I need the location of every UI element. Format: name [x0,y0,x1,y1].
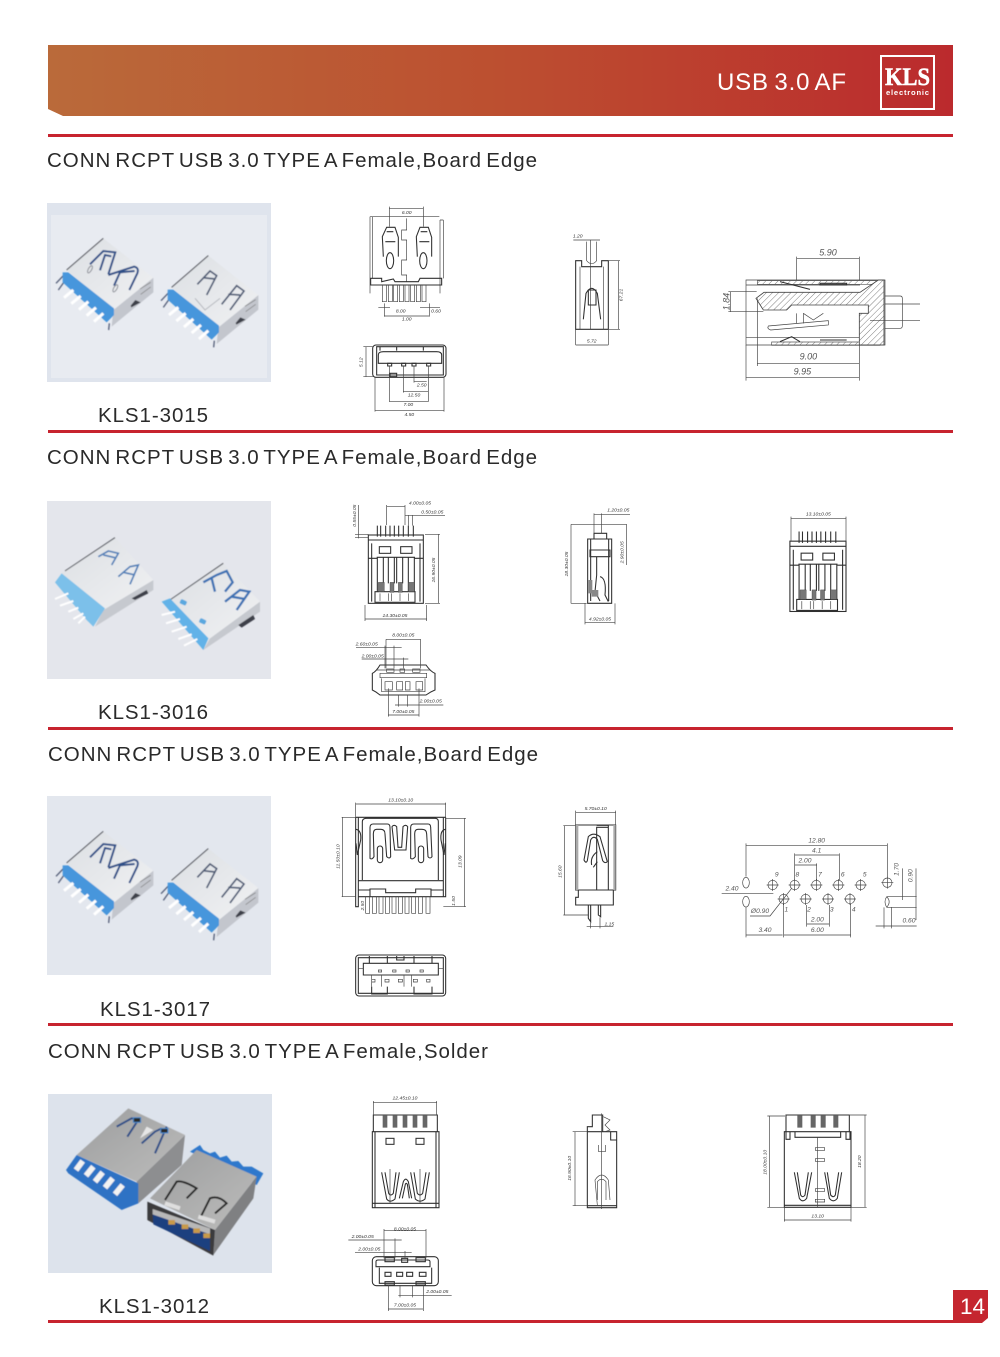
drawing: top view: 14.30±0.05 [383,613,408,619]
drawing: front view: 8.00±0.05 [392,632,415,638]
drawing: footprint: 6 [841,872,845,879]
drawing: bottom view: 18.20 [857,1155,863,1168]
header band [48,45,953,116]
drawing: front views: 5.12 [359,357,365,367]
drawing: front view: 2.60±0.05 [355,642,378,648]
drawing: front view [355,632,443,717]
drawing: top view: 1.50 [451,896,457,906]
drawing: side view: 15.60 [558,865,564,878]
drawing: side view: 16.90±0.10 [567,1156,573,1181]
drawing: front views: 1.00 [402,317,412,323]
divider lines [48,134,953,1323]
drawing: footprint [722,838,917,937]
drawing: footprint: 2.40 [725,886,739,893]
drawing: top view [335,798,466,913]
drawing: footprint: 6.00 [811,927,824,934]
drawing: bottom view: 13.10 [811,1213,824,1219]
drawing: front view [356,955,446,996]
drawing: front views: 8.00 [396,308,406,314]
KLS logo: KLS [885,64,930,91]
drawing: footprint: 12.80 [808,838,825,845]
drawing: section view: 5.90 [819,247,837,257]
drawing: front view: 8.00±0.05 [394,1226,416,1232]
drawing: front view: 2.00±0.05 [357,1247,381,1253]
drawing: side view: 18.30±0.05 [564,551,570,576]
drawing: footprint: 0.90 [907,869,914,882]
page number [953,1290,988,1323]
drawing: bottom view: 18.00±0.10 [763,1150,769,1175]
drawing: front views [359,207,446,418]
drawing: footprint: 1 [784,906,788,913]
drawing: front views: 7.00 [403,402,413,408]
model label: KLS1-3015 [98,404,208,427]
drawing: bottom view [763,1115,867,1222]
drawing: footprint: 2.00 [798,858,812,865]
drawing: side view [567,1113,617,1209]
model label: KLS1-3017 [100,998,210,1021]
drawing: section view: 9.00 [800,352,817,362]
panel: KLS1-3017 [47,743,917,1021]
drawing: front views: 6.00 [402,210,412,216]
drawing: top view: 13.09 [458,855,464,868]
drawing: footprint: 2.00 [810,916,824,923]
drawing: top view [352,501,445,621]
drawing: footprint: 2 [806,906,811,913]
drawing: footprint: 8 [795,872,799,879]
drawing: side view: 1.20 [573,234,583,240]
drawing: side view: 1.15 [604,921,614,927]
drawing: footprint: 4.1 [812,848,822,855]
drawing: footprint: 0.60 [903,917,916,924]
drawing: front view: 2.00±0.05 [361,653,384,659]
drawing: footprint: 9 [775,872,779,879]
product photo [47,501,271,679]
drawing: front view [348,1226,452,1311]
model label: KLS1-3012 [99,1295,209,1318]
product photo [47,203,271,382]
heading: CONN RCPT USB 3.0 TYPE A Female,Board Edge [47,149,537,172]
drawing: top view: 12.45±0.10 [393,1095,418,1101]
product photo [48,1094,272,1273]
drawing: footprint: 5 [863,872,867,879]
drawing: front view: 2.00±0.05 [351,1234,374,1240]
drawing: top view: 0.55±0.05 [352,504,358,527]
drawing: front views: 2.50 [416,383,427,389]
drawing: footprint: 4 [852,906,856,913]
drawing: footprint: 7 [818,872,822,879]
model label: KLS1-3016 [98,701,208,724]
drawing: side view: 2.90±0.05 [619,541,625,564]
drawing: side view [558,806,616,928]
drawing: footprint: 1.70 [894,863,901,876]
drawing: side view [573,234,625,345]
drawing: section view: 9.95 [794,366,812,376]
drawing: front views: 0.60 [431,308,441,314]
heading: CONN RCPT USB 3.0 TYPE A Female,Board Edge [47,446,537,469]
KLS logo [881,56,934,109]
panel: KLS1-3015 [47,149,920,427]
drawing: top view: 2.50 [360,901,366,912]
drawing: bottom view: 13.10±0.05 [806,512,831,518]
drawing: front views: 4.50 [404,412,414,418]
drawing: side view: 5.72 [587,339,597,345]
drawing: front view: 7.00±0.05 [392,709,415,715]
drawing: top view [372,1095,439,1208]
heading: CONN RCPT USB 3.0 TYPE A Female,Solder [48,1040,488,1063]
drawing: top view: 0.50±0.05 [421,510,444,516]
panel: KLS1-3016 [47,446,846,724]
drawing: section view: 1.84 [721,293,731,310]
drawing: footprint: Ø0.90 [750,908,769,915]
drawing: side view [564,508,630,624]
page number: 14 [960,1294,985,1319]
drawing: side view: 67.21 [619,289,625,301]
KLS logo: electronic [886,88,929,97]
drawing: side view: 4.92±0.05 [589,616,611,622]
drawing: front view: 7.00±0.05 [394,1302,416,1308]
drawing: side view: 1.20±0.05 [607,508,630,514]
drawing: front views: 12.50 [408,393,420,399]
drawing: front view: 2.00±0.05 [419,699,442,705]
drawing: footprint: 3.40 [759,927,772,934]
product photo [47,796,271,975]
drawing: top view: 4.00±0.05 [409,501,431,507]
drawing: front view: 2.00±0.05 [425,1289,449,1295]
panel: KLS1-3012 [48,1040,867,1318]
heading: CONN RCPT USB 3.0 TYPE A Female,Board Edge [48,743,538,766]
drawing: section view [721,247,920,381]
drawing: footprint: 3 [830,906,834,913]
drawing: side view: 5.70±0.10 [585,806,607,812]
drawing: bottom view [790,512,846,611]
drawing: top view: 11.50±0.10 [335,844,341,869]
header title: USB 3.0 AF [717,69,846,96]
drawing: top view: 16.90±0.05 [431,557,437,582]
drawing: top view: 13.10±0.10 [388,798,413,804]
